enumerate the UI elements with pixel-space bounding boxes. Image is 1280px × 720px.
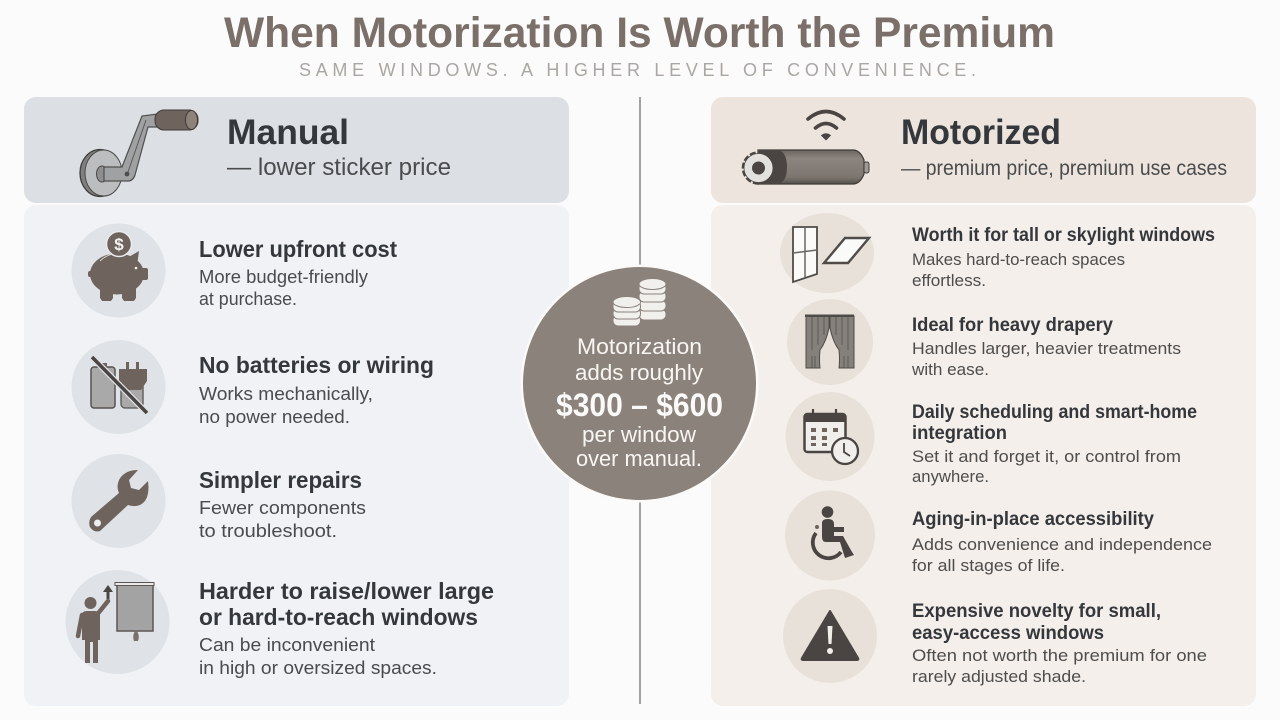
icon: wheelchair	[785, 490, 875, 580]
text: aging-in-place accessibility: Adds convenience and independence	[912, 535, 1212, 554]
text: tall or skylight windows: Makes hard-to-reach spaces	[912, 250, 1125, 269]
text: no batteries or wiring: No batteries or wiring	[199, 352, 434, 378]
icon: window crank	[80, 110, 198, 196]
callout text: $300 – $600	[556, 387, 723, 423]
text: expensive novelty: Often not worth the premium for one	[912, 646, 1207, 665]
text: tall or skylight windows	[912, 224, 1215, 290]
icon: warning triangle	[783, 589, 877, 683]
item: expensive novelty	[783, 589, 1207, 686]
text: daily scheduling: anywhere.	[912, 467, 989, 486]
text: tall or skylight windows: effortless.	[912, 271, 986, 290]
icon: piggy bank	[72, 224, 166, 318]
item: simpler repairs	[72, 454, 366, 548]
icon: wifi	[808, 112, 844, 140]
callout text	[556, 334, 723, 471]
icon: coin stacks	[613, 278, 666, 326]
text: daily scheduling	[912, 401, 1197, 486]
icon: person reaching a tall shade	[66, 570, 170, 674]
text: lower upfront cost: at purchase.	[199, 288, 297, 309]
text: no batteries or wiring: no power needed.	[199, 406, 350, 427]
text: daily scheduling: Daily scheduling and smart-home	[912, 401, 1197, 423]
panel: manual	[24, 97, 569, 706]
icon: curtains	[787, 299, 873, 385]
motorized header band	[711, 97, 1256, 203]
text: lower upfront cost: Lower upfront cost	[199, 236, 397, 262]
text: expensive novelty: rarely adjusted shade.	[912, 667, 1086, 686]
item: aging-in-place accessibility	[785, 490, 1212, 580]
text: expensive novelty	[912, 600, 1207, 686]
icon: wrench	[72, 454, 166, 548]
icon: crossed out battery and plug	[72, 340, 166, 434]
manual heading: Manual	[227, 113, 349, 152]
text: simpler repairs: to troubleshoot.	[199, 520, 337, 541]
motorized heading: Motorized	[901, 113, 1061, 152]
item: lower upfront cost	[72, 224, 397, 318]
text: simpler repairs	[199, 467, 366, 541]
text: harder to raise or lower: or hard-to-reach windows	[199, 604, 478, 630]
text: tall or skylight windows: Worth it for tall or skylight windows	[912, 224, 1215, 246]
subtitle: SAME WINDOWS. A HIGHER LEVEL OF CONVENIENCE.	[299, 60, 976, 80]
callout text: per window	[582, 422, 696, 447]
motorized list panel	[711, 205, 1256, 706]
item: daily scheduling	[786, 392, 1197, 486]
icon: calendar and clock	[786, 392, 874, 481]
callout text: over manual.	[576, 446, 702, 471]
icon: roller motor	[743, 150, 869, 184]
text: daily scheduling: Set it and forget it, or control from	[912, 447, 1181, 466]
item: harder to raise or lower	[66, 570, 494, 678]
text: simpler repairs: Fewer components	[199, 497, 366, 518]
text: aging-in-place accessibility	[912, 508, 1212, 575]
manual list panel	[24, 205, 569, 706]
text: expensive novelty: Expensive novelty for small,	[912, 600, 1161, 622]
item: heavy drapery	[787, 299, 1181, 385]
text: heavy drapery: with ease.	[911, 360, 989, 379]
text: no batteries or wiring: Works mechanically,	[199, 383, 373, 404]
panel: motorized	[711, 97, 1256, 706]
title: When Motorization Is Worth the Premium	[224, 9, 1055, 57]
text: heavy drapery: Ideal for heavy drapery	[912, 314, 1113, 336]
icon: piggy bank: $	[114, 235, 124, 254]
callout text: Motorization	[577, 334, 702, 359]
text: lower upfront cost: More budget-friendly	[199, 266, 369, 287]
text: heavy drapery: Handles larger, heavier treatments	[912, 339, 1181, 358]
text: aging-in-place accessibility: Aging-in-place accessibility	[912, 508, 1154, 530]
text: harder to raise or lower: Can be inconvenient	[199, 634, 375, 655]
text: aging-in-place accessibility: for all stages of life.	[912, 556, 1065, 575]
icon: window and skylight	[780, 213, 874, 293]
manual header band	[24, 97, 569, 203]
item: no batteries or wiring	[72, 340, 434, 434]
text: simpler repairs: Simpler repairs	[199, 467, 362, 493]
item: tall or skylight windows	[780, 213, 1215, 293]
callout text: adds roughly	[575, 360, 703, 385]
text: expensive novelty: easy-access windows	[912, 622, 1104, 644]
motorized subheading: — premium price, premium use cases	[901, 157, 1227, 180]
text: daily scheduling: integration	[912, 422, 1007, 444]
manual subheading: — lower sticker price	[227, 154, 451, 181]
text: heavy drapery	[911, 314, 1181, 379]
text: harder to raise or lower	[199, 578, 494, 678]
text: harder to raise or lower: in high or oversized spaces.	[199, 657, 437, 678]
text: harder to raise or lower: Harder to raise/lower large	[199, 578, 494, 604]
text: lower upfront cost	[199, 236, 397, 309]
callout: price difference	[520, 264, 758, 502]
text: no batteries or wiring	[199, 352, 434, 427]
